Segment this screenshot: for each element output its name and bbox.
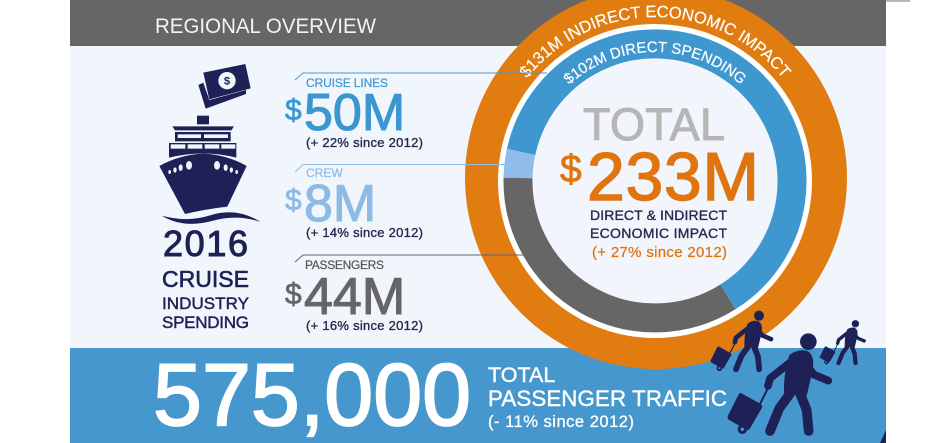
donut chart: economic impact <box>465 0 847 369</box>
icon: ship body <box>159 116 261 224</box>
stat: passengers: PASSENGERS <box>305 258 384 272</box>
header band: REGIONAL OVERVIEW <box>155 15 376 38</box>
stat: cruise lines: (+ 22% since 2012) <box>306 135 423 150</box>
stat: cruise lines: 50M <box>304 84 405 142</box>
center total: 233M <box>587 139 759 215</box>
icon: banknotes: $ <box>224 76 231 88</box>
stat: crew: (+ 14% since 2012) <box>306 225 423 240</box>
edge shadow <box>886 0 910 2</box>
callout line: crew <box>295 164 505 172</box>
heading: 2016 cruise industry spending: 2016 <box>163 223 248 264</box>
stat: crew: $ <box>285 184 302 217</box>
stat: cruise lines: CRUISE LINES <box>306 76 388 90</box>
icon: travellers with luggage <box>711 311 864 434</box>
icon: banknotes <box>198 64 251 109</box>
stat: passengers: $ <box>285 278 302 311</box>
stat: passenger traffic <box>153 345 727 443</box>
curved label: direct spending: $102M DIRECT SPENDING <box>564 41 746 84</box>
stat: crew: 8M <box>304 175 376 233</box>
icon: cruise ship with money flag <box>159 64 261 224</box>
stat: passenger traffic: PASSENGER TRAFFIC <box>488 386 727 411</box>
stat: passengers: 44M <box>304 268 405 326</box>
center total: (+ 27% since 2012) <box>592 244 727 261</box>
center total: ECONOMIC IMPACT <box>590 225 727 241</box>
heading: 2016 cruise industry spending: SPENDING <box>162 313 249 332</box>
center total <box>560 99 759 261</box>
callout line: cruise lines <box>295 73 547 80</box>
heading: 2016 cruise industry spending <box>162 223 249 332</box>
center total: TOTAL <box>583 99 725 150</box>
center total: $ <box>560 148 582 191</box>
stat: passenger traffic: 575,000 <box>153 345 471 443</box>
header band <box>70 0 886 46</box>
center total: DIRECT & INDIRECT <box>590 207 727 223</box>
stat: passengers <box>285 258 423 333</box>
heading: 2016 cruise industry spending: INDUSTRY <box>162 294 249 313</box>
curved label: indirect impact: $131M INDIRECT ECONOMIC IMPACT <box>520 6 792 78</box>
stat: passenger traffic: (- 11% since 2012) <box>488 413 634 431</box>
stat: crew: CREW <box>306 166 343 180</box>
bottom band <box>70 348 886 443</box>
stat: passenger traffic: TOTAL <box>488 363 555 387</box>
stat: cruise lines: $ <box>285 94 302 127</box>
stat: crew <box>285 166 423 240</box>
heading: 2016 cruise industry spending: CRUISE <box>162 266 249 292</box>
corner fragment <box>880 430 886 443</box>
stat: passengers: (+ 16% since 2012) <box>306 318 423 333</box>
stat: cruise lines <box>285 76 423 150</box>
callout line: passengers <box>295 255 530 262</box>
